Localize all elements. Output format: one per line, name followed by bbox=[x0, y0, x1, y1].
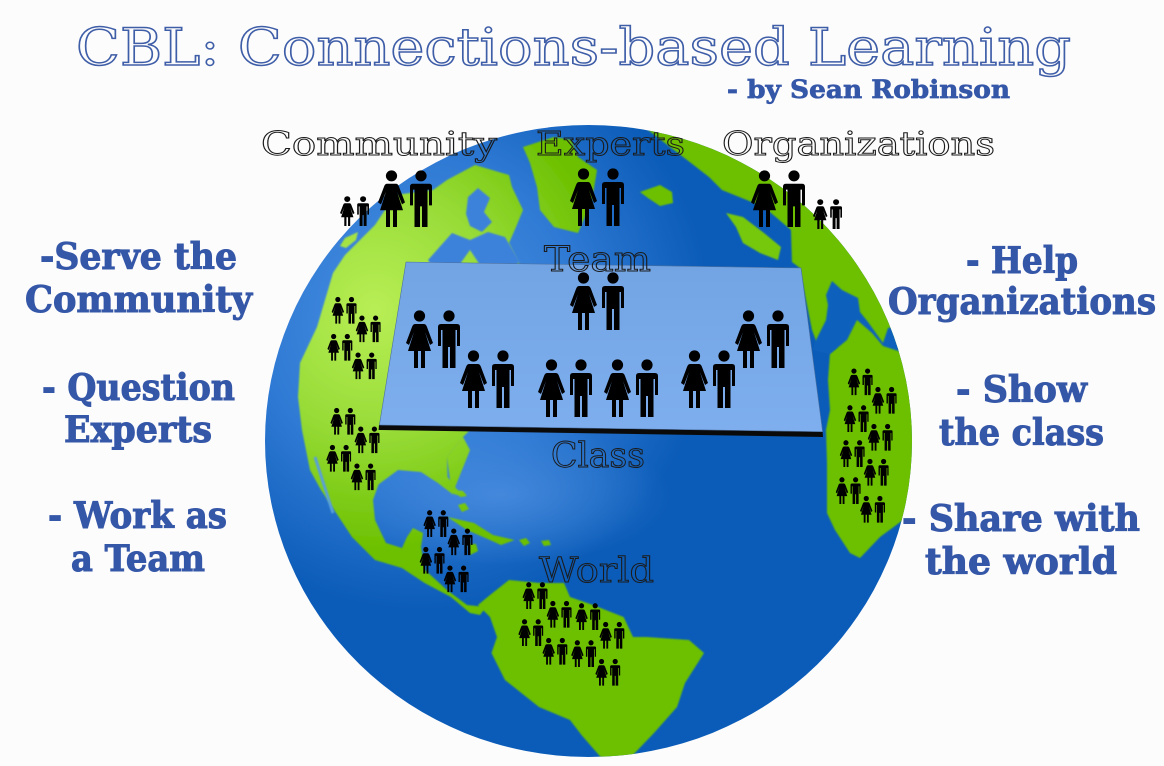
text block: left actions: Experts bbox=[64, 409, 212, 451]
text block: right actions: - Help bbox=[966, 240, 1078, 282]
people: west coast lower cluster bbox=[326, 408, 380, 490]
globe bbox=[260, 120, 930, 765]
peninsula: Florida bbox=[447, 437, 470, 495]
label: Experts: Experts bbox=[536, 124, 685, 163]
text block: left actions: - Work as bbox=[48, 495, 227, 537]
panel: class sheet bbox=[379, 262, 823, 437]
text block: left actions bbox=[25, 236, 253, 580]
text block: right actions: Organizations bbox=[888, 281, 1156, 323]
text block: left actions: -Serve the bbox=[40, 236, 237, 278]
people: organizations bbox=[751, 170, 842, 229]
label: Community: Community bbox=[261, 124, 497, 163]
text block: right actions: - Show bbox=[956, 369, 1088, 411]
text block: right actions: the world bbox=[925, 541, 1117, 583]
icon: small arctic island bbox=[340, 232, 358, 248]
continent: Greenland bbox=[523, 137, 597, 233]
continent: Europe bbox=[648, 130, 930, 348]
text block: right actions bbox=[888, 240, 1156, 583]
text block: right actions: the class bbox=[939, 412, 1104, 454]
people: South America cluster bbox=[518, 582, 624, 686]
continent: North America bbox=[298, 165, 528, 615]
people: community bbox=[340, 170, 432, 227]
continent: Africa bbox=[825, 339, 912, 559]
islands: Caribbean bbox=[448, 490, 551, 555]
title: CBL: Connections-based Learning bbox=[76, 19, 1071, 78]
text block: right actions: - Share with bbox=[902, 498, 1140, 540]
text block: left actions: Community bbox=[25, 279, 253, 321]
label: Class: Class bbox=[551, 436, 645, 476]
seas: Hudson Bay and Mediterranean bbox=[315, 188, 925, 513]
people: Africa cluster bbox=[836, 368, 897, 523]
label: Team: Team bbox=[544, 240, 651, 280]
continent: South America bbox=[478, 580, 704, 757]
people: team on the sheet bbox=[406, 272, 789, 417]
people: Central America cluster bbox=[420, 510, 472, 592]
people: experts bbox=[570, 168, 624, 226]
island: Iceland bbox=[640, 185, 673, 206]
label: Organizations: Organizations bbox=[722, 124, 995, 163]
label: World: World bbox=[539, 551, 654, 591]
text block: left actions: - Question bbox=[42, 367, 235, 409]
text block: left actions: a Team bbox=[71, 538, 205, 580]
byline: - by Sean Robinson bbox=[727, 75, 1010, 104]
people: west coast upper cluster bbox=[327, 297, 381, 379]
